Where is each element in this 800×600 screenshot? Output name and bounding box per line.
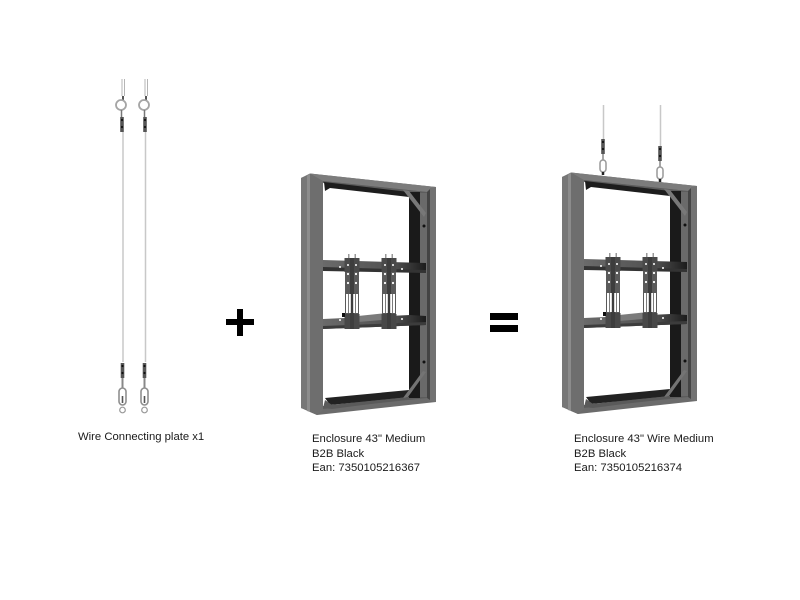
- caption: enclosure wire medium: Ean: 7350105216374: [574, 462, 682, 474]
- caption: wire plate: Wire Connecting plate x1: [78, 431, 204, 443]
- caption: enclosure medium: Ean: 7350105216367: [312, 462, 420, 474]
- caption: enclosure wire medium: Enclosure 43" Wire Medium: [574, 433, 714, 445]
- caption: enclosure wire medium: B2B Black: [574, 448, 626, 460]
- caption: enclosure medium: Enclosure 43" Medium: [312, 433, 425, 445]
- enclosure with wires: [562, 105, 697, 414]
- plus sign: [226, 309, 254, 336]
- equals sign: [490, 313, 518, 332]
- caption: enclosure medium: B2B Black: [312, 448, 364, 460]
- enclosure medium: [301, 174, 436, 415]
- wire set: [116, 79, 149, 413]
- suspension wires: [600, 105, 663, 182]
- wire left: [116, 79, 126, 413]
- wire right: [139, 79, 149, 413]
- caption: enclosure medium: [312, 433, 425, 474]
- caption: enclosure wire medium: [574, 433, 714, 474]
- enclosure frame: [562, 172, 697, 414]
